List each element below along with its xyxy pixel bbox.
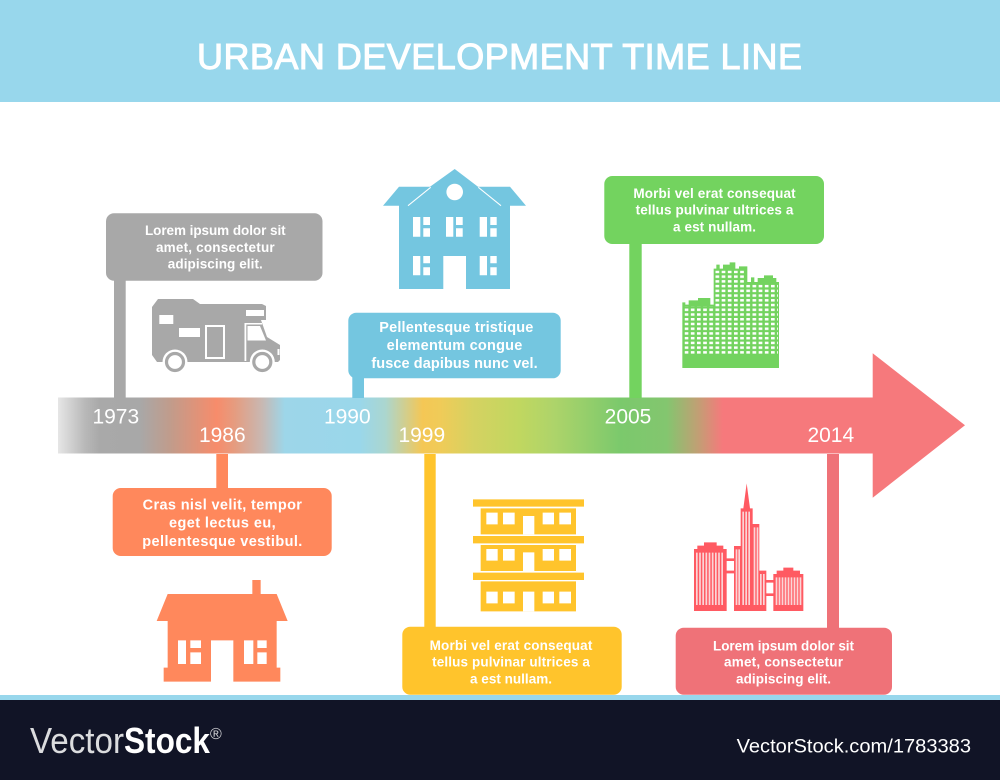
callout text: tellus pulvinar ultrices a	[636, 203, 794, 218]
panel: 1973 callout	[106, 213, 322, 398]
connector stem	[216, 454, 228, 494]
footer logo	[30, 720, 222, 761]
header banner	[0, 0, 1000, 102]
callout text: Morbi vel erat consequat	[430, 638, 593, 653]
connector stem	[114, 270, 126, 398]
callout text	[430, 638, 593, 686]
year: 2005: 2005	[605, 405, 651, 428]
callout text: adipiscing elit.	[168, 256, 263, 272]
callout text: adipiscing elit.	[736, 671, 831, 686]
callout text: amet, consectetur	[156, 240, 275, 255]
year: 1999: 1999	[398, 424, 445, 447]
callout box	[676, 628, 892, 695]
callout text: elementum congue	[387, 338, 522, 354]
callout text	[145, 223, 286, 272]
callout text: Lorem ipsum dolor sit	[713, 638, 854, 653]
icon: orange house	[157, 580, 288, 682]
callout box	[113, 488, 332, 556]
panel: 1986 callout	[113, 454, 332, 556]
callout text: amet, consectetur	[724, 655, 844, 670]
year: 1990: 1990	[324, 405, 371, 428]
callout text: pellentesque vestibul.	[142, 534, 302, 550]
callout text: a est nullam.	[470, 671, 552, 686]
callout text: fusce dapibus nunc vel.	[371, 356, 538, 372]
callout text	[633, 186, 796, 234]
callout text: eget lectus eu,	[169, 516, 276, 532]
timeline arrow	[58, 353, 965, 498]
year: 1986: 1986	[199, 424, 246, 447]
callout text: Pellentesque tristique	[379, 320, 533, 336]
footer logo: ®	[210, 726, 222, 743]
callout text: Morbi vel erat consequat	[633, 186, 796, 201]
connector stem	[424, 454, 436, 634]
icon: camper van	[152, 299, 280, 374]
panel: 1990 callout	[348, 313, 561, 398]
callout text	[371, 320, 538, 372]
callout text: Lorem ipsum dolor sit	[145, 223, 286, 238]
footer logo: Stock	[124, 720, 211, 761]
callout text	[713, 638, 854, 686]
footer accent strip	[0, 695, 1000, 700]
connector stem	[827, 454, 839, 634]
title: URBAN DEVELOPMENT TIME LINE	[197, 36, 802, 77]
panel: 1999 callout	[402, 454, 622, 695]
footer bar	[0, 700, 1000, 780]
callout box	[106, 213, 322, 281]
callout box	[604, 176, 824, 244]
callout box	[402, 627, 622, 695]
year labels	[92, 405, 854, 447]
icon: red skyscrapers	[694, 483, 803, 611]
icon: green apartment block	[682, 262, 779, 368]
footer image id: VectorStock.com/1783383	[737, 737, 971, 758]
callout text: a est nullam.	[673, 219, 756, 234]
icon: yellow low-rise building	[473, 499, 584, 611]
year: 2014: 2014	[807, 424, 854, 447]
callout box	[348, 313, 561, 378]
panel: 2014 callout	[676, 454, 892, 695]
panel: 2005 callout	[604, 176, 824, 398]
connector stem	[352, 365, 364, 398]
callout text	[142, 497, 302, 550]
footer logo: Vector	[30, 720, 124, 761]
year: 1973: 1973	[92, 405, 139, 428]
callout text: Cras nisl velit, tempor	[143, 497, 302, 513]
icon: large blue house	[383, 169, 526, 289]
connector stem	[629, 235, 642, 398]
callout text: tellus pulvinar ultrices a	[432, 655, 590, 670]
